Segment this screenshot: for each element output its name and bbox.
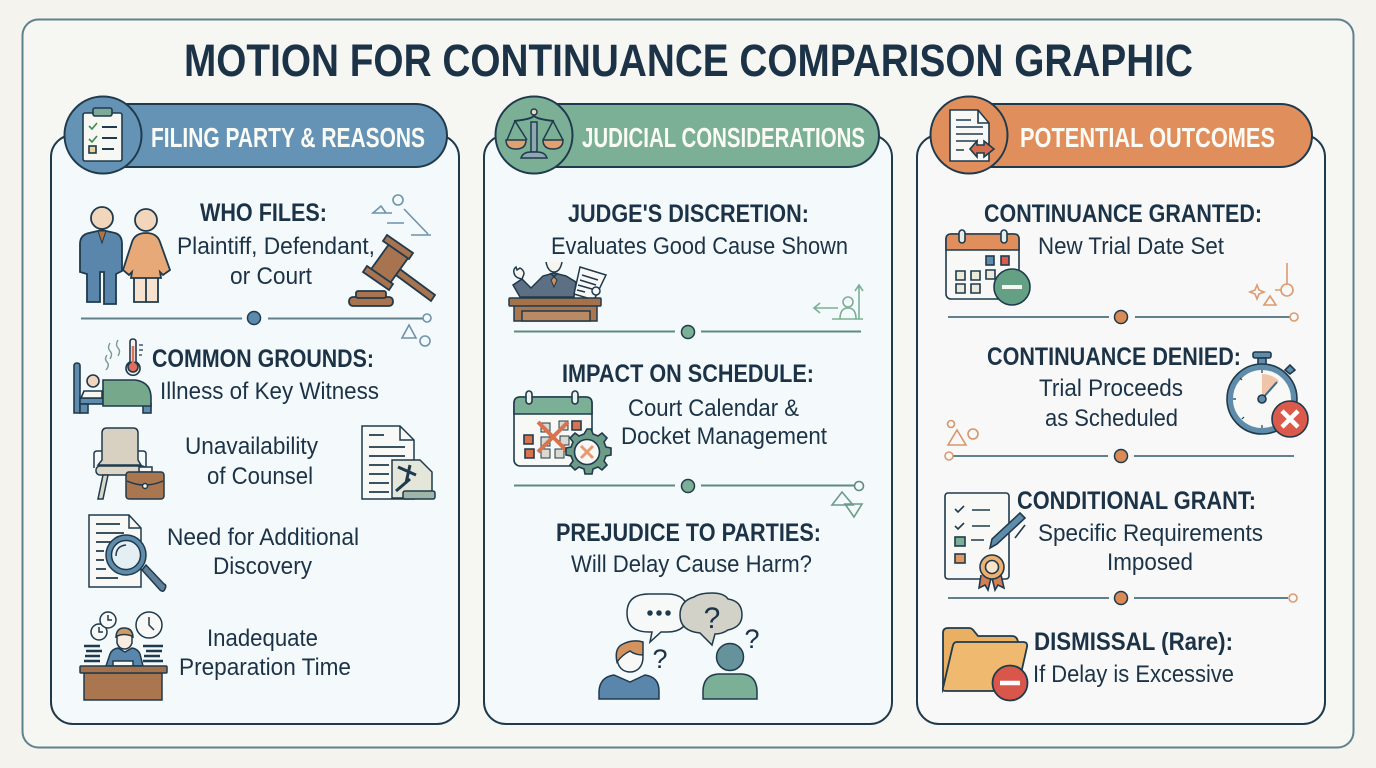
text: unavailability of counsel: of Counsel: [207, 463, 313, 490]
text: dismissal: DISMISSAL (Rare):: [1034, 628, 1233, 656]
decoration: shapes: [1250, 263, 1293, 305]
text: continuance denied: [987, 343, 1241, 432]
text: unavailability of counsel: Unavailability: [185, 433, 319, 460]
header: judicial considerations: JUDICIAL CONSIDERATIONS: [582, 122, 865, 153]
text: continuance granted: CONTINUANCE GRANTED:: [984, 200, 1262, 228]
text: common grounds: [152, 345, 379, 405]
text: judge's discretion: JUDGE'S DISCRETION:: [568, 200, 809, 228]
panel: potential outcomes: [917, 96, 1325, 724]
text: who files: Plaintiff, Defendant,: [177, 233, 375, 260]
text: continuance denied: CONTINUANCE DENIED:: [987, 343, 1241, 371]
text: inadequate preparation time: Inadequate: [207, 625, 318, 652]
text: who files: [177, 199, 375, 290]
icon: document with gavel: [362, 426, 435, 499]
text: prejudice to parties: Will Delay Cause Harm?: [571, 551, 812, 578]
text: unavailability of counsel: [185, 433, 319, 490]
decoration: triangle and circle: [402, 325, 430, 346]
text: conditional grant: [1017, 487, 1263, 576]
icon: clipboard: [83, 108, 122, 161]
icon: document and magnifying glass: [89, 515, 166, 591]
icon: folder with minus badge: [943, 628, 1028, 700]
text: inadequate preparation time: Preparation Time: [179, 654, 351, 681]
text: need for additional discovery: Discovery: [213, 553, 313, 580]
header: potential outcomes: POTENTIAL OUTCOMES: [1020, 122, 1275, 153]
decoration: arrows and person: [814, 285, 863, 319]
header: judicial considerations: [496, 96, 879, 174]
text: dismissal: [1033, 628, 1234, 688]
divider: [81, 312, 431, 324]
text: continuance granted: [984, 200, 1262, 260]
text: impact on schedule: [562, 360, 827, 450]
text: continuance denied: as Scheduled: [1045, 405, 1178, 432]
icon: two people: [80, 207, 170, 304]
decoration: top right shapes: [372, 195, 431, 235]
text: impact on schedule: Court Calendar &: [628, 395, 799, 422]
icon: stopwatch with red x: [1227, 352, 1308, 437]
text: judge's discretion: [551, 200, 848, 260]
text: need for additional discovery: [167, 524, 359, 580]
text: who files: or Court: [230, 263, 312, 290]
icon: document with arrows: [950, 110, 994, 161]
icon: calendar with gear: [514, 391, 611, 474]
divider: [514, 480, 864, 492]
text: prejudice to parties: [556, 519, 821, 578]
header: potential outcomes: [930, 96, 1312, 174]
text: impact on schedule: IMPACT ON SCHEDULE:: [562, 360, 814, 388]
text: prejudice to parties: PREJUDICE TO PARTIES:: [556, 519, 821, 547]
header: filing party and reasons: [64, 96, 447, 174]
icon: two people with speech bubbles: ?: [744, 624, 760, 654]
icon: sick bed with thermometer: [74, 339, 151, 413]
text: impact on schedule: Docket Management: [621, 423, 827, 450]
icon: scales of justice: [506, 109, 563, 158]
icon: two people with speech bubbles: [599, 593, 760, 699]
icon: empty chair and briefcase: [94, 428, 164, 499]
text: who files: WHO FILES:: [200, 199, 327, 227]
icon: person at desk with clocks: [80, 612, 167, 700]
divider: [945, 450, 1294, 462]
text: common grounds: COMMON GROUNDS:: [152, 345, 374, 373]
divider: [514, 326, 861, 338]
decoration: triangle and circles: [948, 420, 978, 445]
text: dismissal: If Delay is Excessive: [1033, 661, 1234, 688]
divider: [948, 592, 1297, 604]
icon: checklist with pen and seal: [945, 493, 1025, 590]
divider: [948, 310, 1298, 324]
text: need for additional discovery: Need for Additional: [167, 524, 359, 551]
text: conditional grant: Imposed: [1107, 549, 1193, 576]
title: MOTION FOR CONTINUANCE COMPARISON GRAPHIC: [184, 35, 1193, 86]
icon: judge at bench: [509, 262, 606, 321]
header: filing party and reasons: FILING PARTY & REASONS: [151, 122, 425, 153]
icon: two people with speech bubbles: ?: [652, 644, 668, 674]
icon: gavel: [349, 235, 435, 306]
panel: judicial considerations: [484, 96, 892, 724]
text: judge's discretion: Evaluates Good Cause Shown: [551, 233, 848, 260]
text: common grounds: Illness of Key Witness: [160, 378, 379, 405]
icon: two people with speech bubbles: ?: [704, 602, 720, 635]
icon: calendar with minus badge: [946, 230, 1030, 305]
text: conditional grant: Specific Requirements: [1038, 520, 1263, 547]
panel: filing party and reasons: [51, 96, 459, 724]
text: conditional grant: CONDITIONAL GRANT:: [1017, 487, 1256, 515]
text: inadequate preparation time: [179, 625, 351, 681]
decoration: triangles: [832, 492, 862, 517]
text: continuance granted: New Trial Date Set: [1038, 233, 1224, 260]
text: continuance denied: Trial Proceeds: [1039, 375, 1183, 402]
